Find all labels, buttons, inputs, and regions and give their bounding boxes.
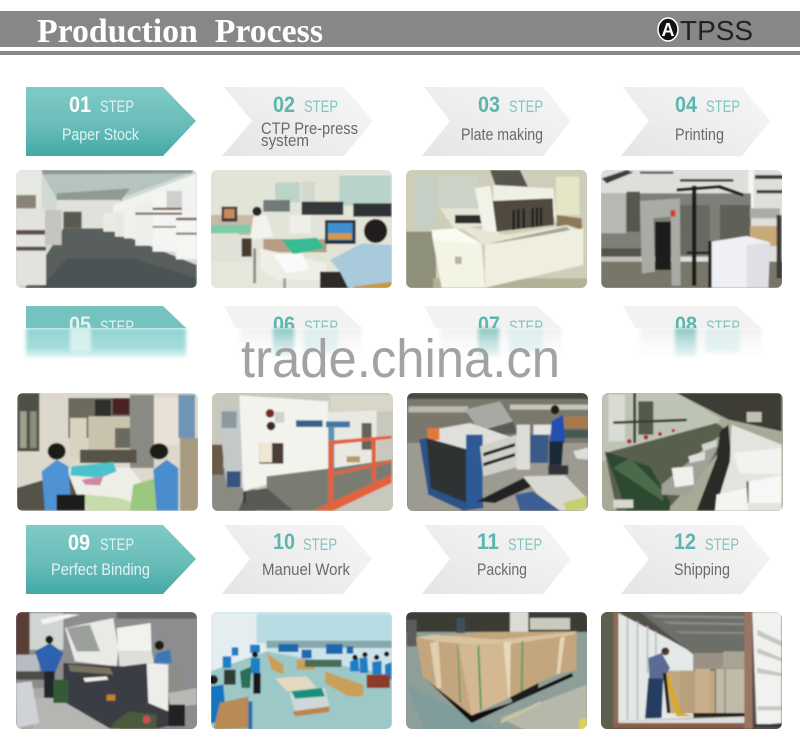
step 11 arrow: Packing [477,561,527,579]
step 08 arrow (faded by watermark): 08 [675,312,697,337]
step 09 arrow: STEP [100,535,134,554]
step 05 arrow (faded by watermark) [26,306,186,357]
step 12 arrow: STEP [705,535,739,554]
step 06 arrow (faded by watermark): 06 [273,312,295,337]
step 11 arrow: 11 [477,529,499,554]
photo 8: gathering line [600,391,787,515]
photo 5: laminating with two workers [15,391,202,515]
step 10 arrow: Manuel Work [262,561,351,579]
photo 12: loading shipping container [598,610,785,733]
photo 9: perfect binding machine [13,610,200,733]
step 12 arrow [621,525,770,594]
photo 2: CTP pre-press room [208,168,397,292]
step 07 arrow (faded by watermark): STEP [509,317,543,336]
step 04 arrow [621,87,770,156]
step 12 arrow: Shipping [674,561,730,579]
step 03 arrow: 03 [478,92,500,117]
step 02 arrow: STEP [304,97,338,116]
step 03 arrow [422,87,571,156]
step 10 arrow: 10 [273,529,295,554]
step 02 arrow: 02 [273,92,295,117]
step 01 arrow [26,87,196,156]
step 10 arrow: STEP [303,535,337,554]
step 10 arrow [222,525,372,594]
step 11 arrow [422,525,571,594]
step 01 arrow: 01 [69,92,91,117]
step 03 arrow: STEP [509,97,543,116]
step 02 arrow: system [261,132,309,150]
step 05 arrow (faded by watermark): STEP [100,317,134,336]
step 01 arrow: STEP [100,97,134,116]
step 09 arrow: Perfect Binding [51,561,150,579]
step 08 arrow (faded by watermark): STEP [706,317,740,336]
photo 1: paper warehouse [13,168,200,292]
step 05 arrow (faded by watermark): 05 [69,312,91,337]
step 07 arrow (faded by watermark) [424,306,562,356]
step 02 arrow: CTP Pre-press [261,120,358,138]
photo 4: offset printing press [598,168,788,292]
step 04 arrow: 04 [675,92,698,117]
step 04 arrow: Printing [675,126,724,144]
step 09 arrow [26,525,196,594]
photo 7: folding machine with operator [405,391,592,515]
logo: ATPSS: TPSS [680,15,753,46]
step 09 arrow: 09 [68,530,90,555]
photo 10: manual work floor [208,610,395,733]
step 06 arrow (faded by watermark): STEP [304,317,338,336]
photo 6: die cutting machine [210,391,397,515]
watermark: trade.china.cn [241,329,560,389]
logo: ATPSS: A [662,20,674,40]
step 12 arrow: 12 [674,529,696,554]
step 06 arrow (faded by watermark) [224,306,362,356]
step 03 arrow: Plate making [461,126,543,144]
header banner [0,11,800,55]
step 07 arrow (faded by watermark): 07 [478,312,500,337]
step 11 arrow: STEP [508,535,542,554]
photo 3: plate making machine [403,168,590,292]
step 02 arrow [222,87,373,156]
title: Production Process [37,13,323,50]
step 01 arrow: Paper Stock [62,126,140,144]
step 04 arrow: STEP [706,97,740,116]
photo 11: packed cartons on pallets [403,610,590,733]
step 08 arrow (faded by watermark) [623,306,762,356]
